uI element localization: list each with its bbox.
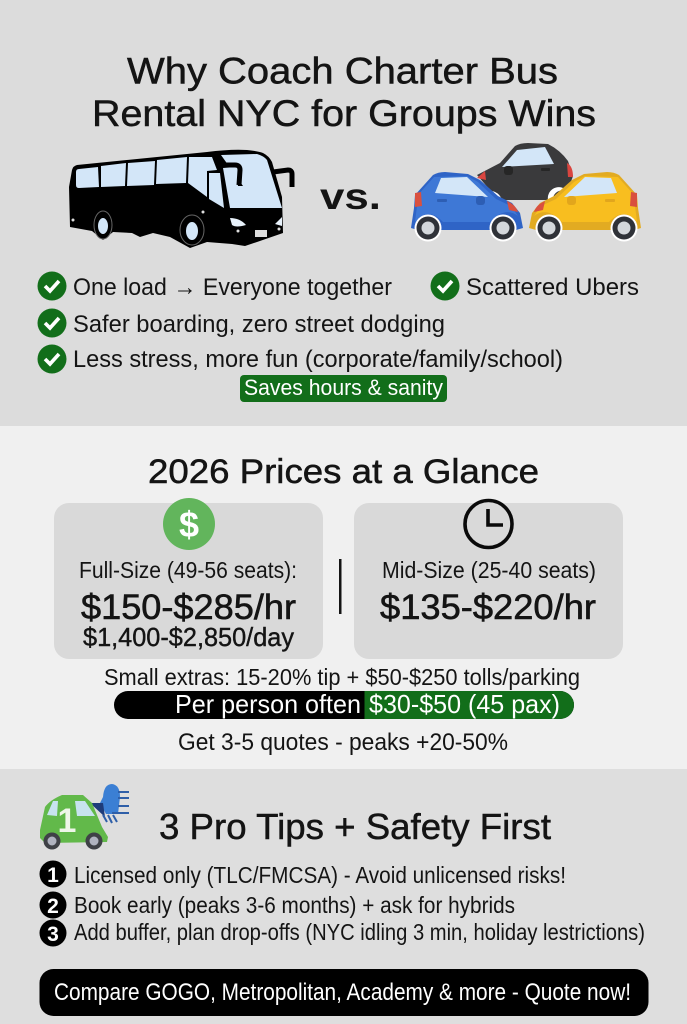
- tip 2: Book early (peaks 3-6 months) + ask for hybrids: [74, 892, 515, 918]
- pill: per person: [114, 689, 574, 719]
- pill: per person: Per person often: [175, 689, 361, 719]
- icon: green car and plug: [40, 784, 129, 850]
- text: mid-size seats: Mid-Size (25-40 seats): [382, 557, 596, 583]
- vs label: vs.: [320, 176, 381, 217]
- call to action: [40, 969, 648, 1016]
- text: full-size hourly: $150-$285/hr: [81, 588, 296, 627]
- icon: clock: [465, 500, 512, 548]
- icon: check: [38, 272, 66, 300]
- icon: dollar: [163, 498, 215, 550]
- icon: check: [38, 344, 66, 374]
- icon: dollar: $: [179, 504, 199, 545]
- panel: why coach wins: [0, 0, 687, 426]
- heading: prices: 2026 Prices at a Glance: [148, 453, 539, 491]
- icon: check: [430, 272, 460, 300]
- text: scattered ubers: Scattered Ubers: [466, 274, 639, 301]
- icon: check: [38, 308, 66, 338]
- tip 3: 3: [47, 923, 59, 946]
- icon: blue car: [411, 172, 523, 242]
- card: full-size: [54, 498, 323, 659]
- text: quotes: Get 3-5 quotes - peaks +20-50%: [178, 729, 508, 756]
- tip 2: 2: [47, 895, 59, 918]
- text: mid-size hourly: $135-$220/hr: [380, 588, 596, 627]
- badge: saves hours: Saves hours & sanity: [244, 375, 444, 400]
- checklist: [38, 272, 639, 374]
- text: small extras: Small extras: 15-20% tip + $50-$250 tolls/parking: [104, 664, 580, 690]
- title: Rental NYC for Groups Wins: [92, 93, 596, 134]
- panel: prices: [0, 426, 687, 769]
- icon: black car: [477, 143, 573, 200]
- divider: [339, 559, 342, 614]
- icon: yellow car: [529, 172, 641, 242]
- panel: pro tips: [0, 769, 687, 1024]
- tip 1: 1: [47, 864, 59, 887]
- pill: per person: $30-$50 (45 pax): [369, 689, 560, 719]
- card: mid-size: [354, 500, 623, 659]
- title: Why Coach Charter Bus: [127, 50, 558, 92]
- text: less stress: Less stress, more fun (corporate/family/school): [73, 346, 563, 373]
- text: full-size seats: Full-Size (49-56 seats):: [79, 557, 297, 583]
- icon: three cars: [411, 143, 641, 242]
- tip 1: Licensed only (TLC/FMCSA) - Avoid unlicensed risks!: [74, 862, 566, 888]
- text: safer boarding: Safer boarding, zero street dodging: [73, 311, 445, 338]
- icon: green car and plug: 1: [58, 802, 76, 840]
- icon: coach bus: [69, 150, 292, 248]
- text: full-size daily: $1,400-$2,850/day: [83, 622, 294, 652]
- text: one load: One load → Everyone together: [73, 274, 392, 301]
- title: [92, 50, 596, 134]
- heading: pro tips: 3 Pro Tips + Safety First: [159, 806, 551, 847]
